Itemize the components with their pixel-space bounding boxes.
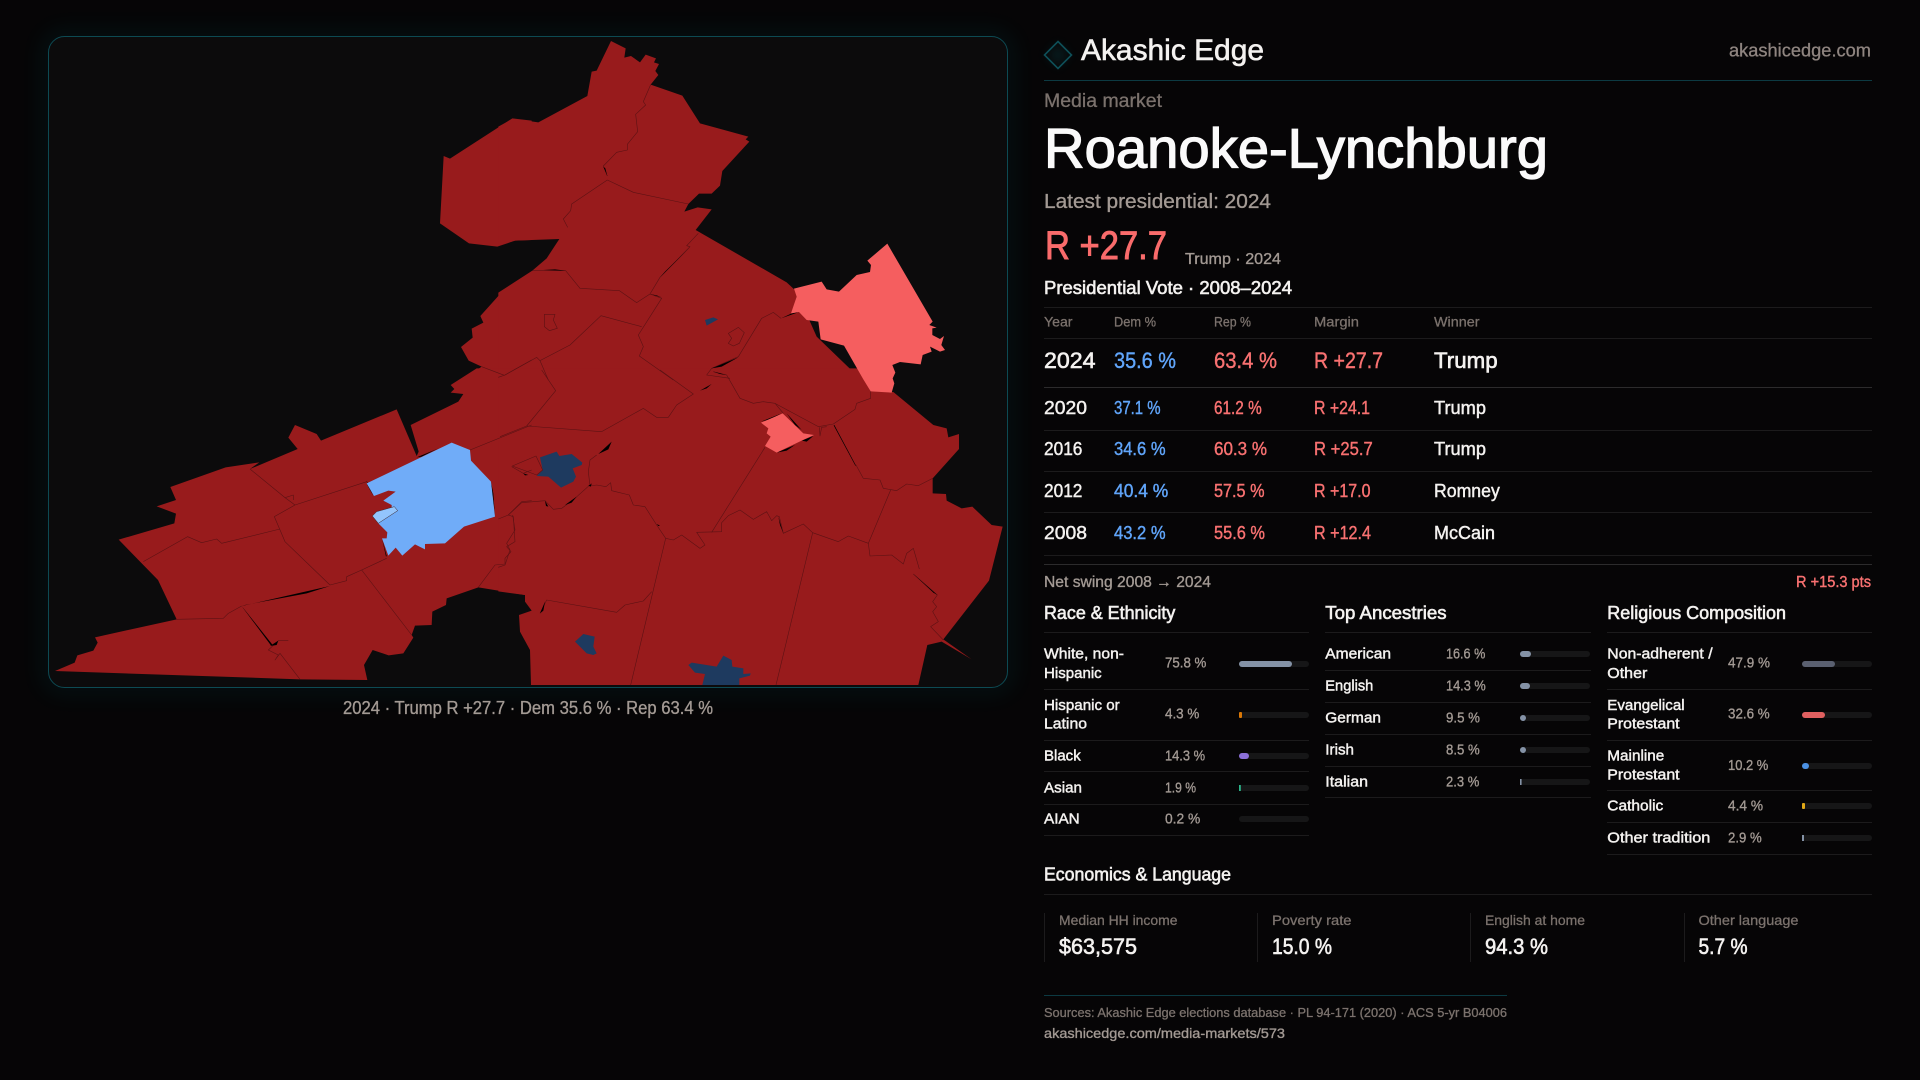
row italian	[1325, 774, 1590, 791]
row mainline: 10.2 %	[1728, 757, 1768, 774]
net swing: R +15.3 pts	[1796, 574, 1871, 591]
row non-adherent	[1607, 646, 1872, 682]
row 2020: 2020	[1044, 398, 1087, 418]
row american	[1325, 646, 1590, 663]
footer: sources	[1044, 996, 1507, 1041]
row asian: 1.9 %	[1165, 780, 1196, 797]
row 2020	[1044, 398, 1486, 418]
eyebrow: media market: Media market	[1044, 91, 1163, 112]
row english: 14.3 %	[1446, 678, 1486, 695]
row 2012: 57.5 %	[1214, 481, 1264, 501]
row 2024: 35.6 %	[1114, 348, 1176, 373]
heading: Race & Ethnicity	[1044, 603, 1175, 623]
row asian	[1044, 780, 1309, 797]
row white: White, non-	[1044, 646, 1124, 663]
row evangelical	[1607, 697, 1872, 733]
stat: other language	[1684, 912, 1799, 962]
row 2020: 37.1 %	[1114, 398, 1161, 418]
table header: Dem %	[1114, 314, 1156, 330]
row asian: Asian	[1044, 780, 1082, 797]
subtitle: Latest presidential: 2024	[1044, 191, 1271, 213]
net swing: Net swing 2008 → 2024	[1044, 574, 1211, 591]
row 2008: R +12.4	[1314, 523, 1371, 543]
map: large Republican-lean county	[791, 244, 945, 393]
stat: poverty rate: 15.0 %	[1272, 934, 1332, 959]
header: brand	[1044, 34, 1871, 68]
row american: 16.6 %	[1446, 646, 1485, 663]
site url: akashicedge.com	[1729, 40, 1871, 60]
net swing	[1044, 574, 1871, 591]
map: dark blue counties	[512, 317, 751, 685]
headline margin	[1045, 224, 1281, 268]
row white	[1044, 646, 1309, 682]
table header: Year	[1044, 314, 1073, 330]
row 2024: Trump	[1434, 348, 1498, 373]
heading: Religious Composition	[1607, 603, 1786, 623]
row 2020: R +24.1	[1314, 398, 1370, 418]
table header: Margin	[1314, 314, 1359, 330]
row 2012: 40.4 %	[1114, 481, 1168, 501]
row black: Black	[1044, 748, 1081, 765]
row non-adherent: Other	[1607, 665, 1647, 682]
heading: Top Ancestries	[1325, 603, 1447, 623]
row catholic	[1607, 798, 1872, 815]
row irish	[1325, 742, 1590, 759]
row 2024: 63.4 %	[1214, 348, 1277, 373]
row other tradition	[1607, 830, 1872, 847]
footer: sources: Sources: Akashic Edge elections database · PL 94-171 (2020) · ACS 5-yr B04006	[1044, 1006, 1507, 1020]
row 2016: 34.6 %	[1114, 439, 1166, 459]
row mainline	[1607, 748, 1872, 783]
row black: 14.3 %	[1165, 748, 1205, 765]
row 2016	[1044, 439, 1486, 459]
stat: english at home	[1470, 912, 1585, 962]
row evangelical: Protestant	[1607, 716, 1680, 733]
row 2016: R +25.7	[1314, 439, 1373, 459]
row 2020: 61.2 %	[1214, 398, 1262, 418]
row hispanic: 4.3 %	[1165, 706, 1199, 723]
row 2008: McCain	[1434, 523, 1495, 543]
row 2016: Trump	[1434, 439, 1486, 459]
row other tradition: 2.9 %	[1728, 830, 1762, 847]
row evangelical: Evangelical	[1607, 697, 1685, 714]
row 2020: Trump	[1434, 398, 1486, 418]
table: presidential vote	[1044, 308, 1872, 556]
row aian: 0.2 %	[1165, 811, 1200, 828]
row german: 9.5 %	[1446, 710, 1480, 727]
stat: median income	[1044, 912, 1178, 962]
brand name: Akashic Edge	[1081, 34, 1264, 67]
map: red counties	[55, 41, 1003, 685]
stat: english at home: English at home	[1485, 912, 1585, 928]
row 2016: 2016	[1044, 439, 1082, 459]
stat: median income: Median HH income	[1059, 912, 1178, 928]
row non-adherent: 47.9 %	[1728, 655, 1770, 672]
table heading: Presidential Vote · 2008–2024	[1044, 278, 1292, 298]
row german: German	[1325, 710, 1381, 727]
stat: poverty rate	[1258, 912, 1352, 962]
stat: other language: Other language	[1698, 912, 1799, 928]
row black	[1044, 748, 1309, 765]
row white: 75.8 %	[1165, 655, 1206, 672]
stat: median income: $63,575	[1059, 934, 1137, 959]
row mainline: Mainline	[1607, 748, 1664, 765]
row 2024: R +27.7	[1314, 348, 1383, 373]
row white: Hispanic	[1044, 665, 1102, 682]
footer: sources: akashicedge.com/media-markets/573	[1044, 1025, 1285, 1041]
row italian: Italian	[1325, 774, 1368, 791]
row italian: 2.3 %	[1446, 774, 1479, 791]
row 2008: 2008	[1044, 523, 1087, 543]
row hispanic	[1044, 697, 1309, 733]
row german	[1325, 710, 1590, 727]
row evangelical: 32.6 %	[1728, 706, 1770, 723]
row catholic: 4.4 %	[1728, 798, 1763, 815]
table header	[1044, 314, 1480, 330]
row 2008: 43.2 %	[1114, 523, 1166, 543]
row mainline: Protestant	[1607, 766, 1680, 783]
map: large Democratic county	[367, 443, 495, 556]
map: small light-red county	[761, 413, 814, 453]
row hispanic: Latino	[1044, 716, 1087, 733]
row 2008: 55.6 %	[1214, 523, 1265, 543]
headline margin: R +27.7	[1045, 224, 1167, 268]
map caption: 2024 · Trump R +27.7 · Dem 35.6 % · Rep 63.4 %	[343, 698, 713, 718]
row catholic: Catholic	[1607, 798, 1664, 815]
row irish: Irish	[1325, 742, 1354, 759]
panel: religious composition	[1607, 603, 1872, 854]
panel: economics and language	[1044, 865, 1872, 962]
map: county borders	[143, 85, 943, 685]
panel: race and ethnicity	[1044, 603, 1309, 836]
row 2012	[1044, 481, 1500, 501]
table header: Rep %	[1214, 314, 1251, 330]
panel: top ancestries	[1325, 603, 1591, 798]
icon: diamond logo	[1044, 42, 1072, 68]
row 2016: 60.3 %	[1214, 439, 1267, 459]
row 2012: Romney	[1434, 481, 1500, 501]
row hispanic: Hispanic or	[1044, 697, 1120, 714]
row english	[1325, 678, 1590, 695]
row english: English	[1325, 678, 1373, 695]
row non-adherent: Non-adherent /	[1607, 646, 1713, 663]
row 2024	[1044, 348, 1498, 373]
row irish: 8.5 %	[1446, 742, 1480, 759]
row 2012: 2012	[1044, 481, 1082, 501]
table header: Winner	[1434, 314, 1480, 330]
title: Roanoke-Lynchburg	[1044, 116, 1548, 180]
row other tradition: Other tradition	[1607, 830, 1710, 847]
stat: other language: 5.7 %	[1698, 934, 1748, 959]
row 2012: R +17.0	[1314, 481, 1370, 501]
stat: poverty rate: Poverty rate	[1272, 912, 1352, 928]
row 2024: 2024	[1044, 348, 1096, 373]
headline margin: Trump · 2024	[1185, 251, 1281, 268]
row aian: AIAN	[1044, 811, 1080, 828]
row aian	[1044, 811, 1309, 828]
heading: Economics & Language	[1044, 865, 1231, 885]
panel: map	[48, 36, 1008, 688]
stat: english at home: 94.3 %	[1485, 934, 1548, 959]
row american: American	[1325, 646, 1391, 663]
row 2008	[1044, 523, 1495, 543]
